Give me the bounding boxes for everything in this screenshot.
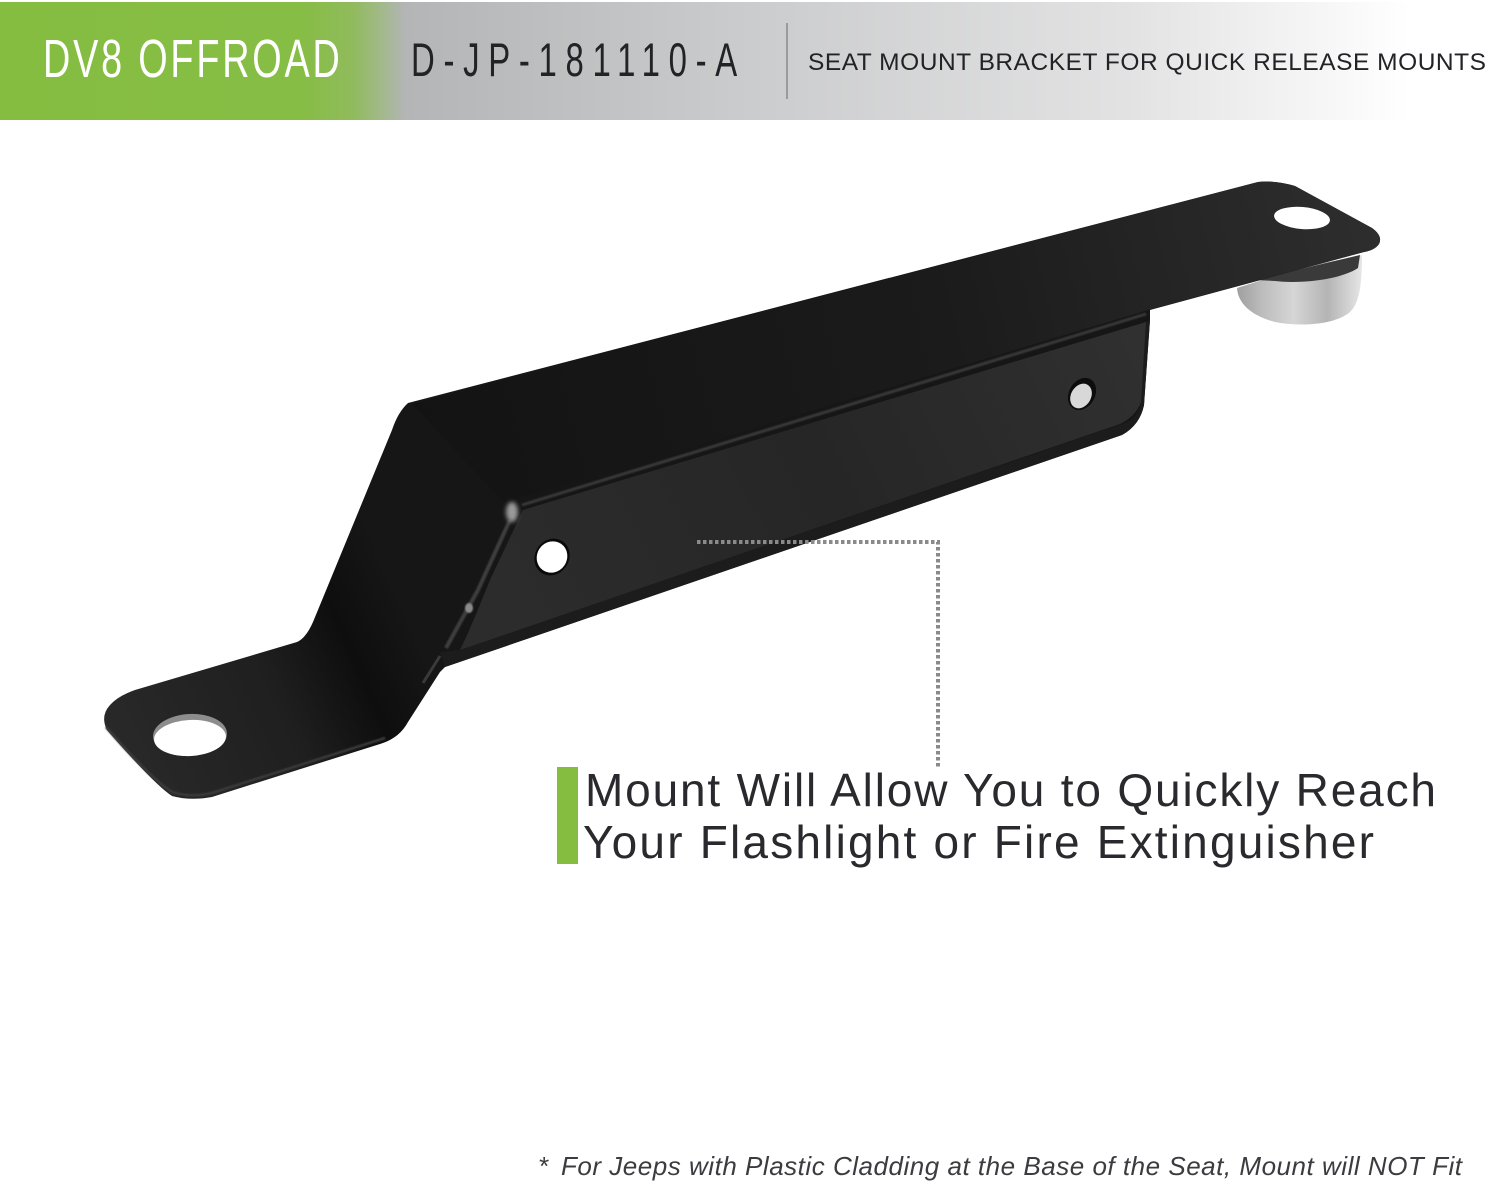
callout [557,764,1436,868]
callout accent bar [557,767,578,864]
silver spacer [1237,255,1362,325]
lower lip [440,320,1150,667]
part number: D-JP-181110-A [411,33,737,86]
header band [0,2,1500,120]
callout leader line [697,542,938,767]
footnote: * [538,1151,549,1181]
mounting holes [1273,205,1331,231]
side face plate [460,322,1146,650]
product image: seat mount bracket [104,182,1380,799]
footnote: For Jeeps with Plastic Cladding at the Base of the Seat, Mount will NOT Fit [561,1151,1464,1181]
callout text: Mount Will Allow You to Quickly Reach [585,764,1436,816]
fold highlights [522,314,1146,505]
callout: Your Flashlight or Fire Extinguisher [583,816,1374,868]
lower tab and left bend [104,182,1380,799]
brand name: DV8 OFFROAD [43,28,340,89]
upper face [412,182,1380,503]
product title: SEAT MOUNT BRACKET FOR QUICK RELEASE MOUNTS [808,49,1486,76]
